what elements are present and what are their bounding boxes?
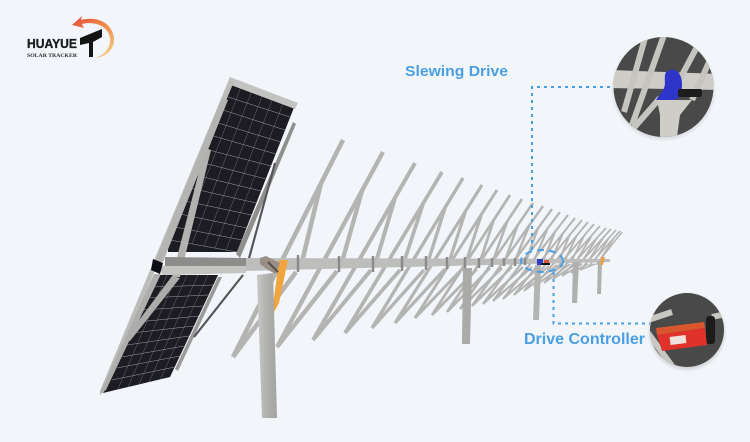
tube far section [243, 258, 610, 271]
dark strut lower [194, 275, 243, 337]
logo wordmark: HUAYUE [27, 37, 77, 51]
truss clamps on tube [298, 255, 525, 272]
leader line: slewing drive [532, 87, 650, 250]
controller front [657, 328, 707, 351]
beams [648, 312, 726, 366]
second post [462, 268, 472, 344]
fourth post [572, 262, 579, 303]
controller sticker [670, 335, 686, 345]
main support post [257, 273, 277, 418]
slewing drive marker on tube [537, 259, 550, 265]
circle shadow [647, 292, 727, 372]
panel grid lines [112, 87, 290, 389]
upper brace [172, 148, 211, 277]
tube open end [151, 259, 163, 274]
orange damper [274, 260, 288, 312]
panel long edge rail [100, 77, 233, 395]
circle contents [614, 37, 714, 137]
controller top [656, 322, 705, 335]
red controller [544, 260, 549, 263]
logo: Huayue Solar Tracker [27, 16, 114, 59]
lower panel cells [103, 275, 218, 393]
circle base [650, 293, 724, 367]
back rail lower [175, 277, 222, 371]
upper panel cells [168, 83, 295, 252]
logo tagline: SOLAR TRACKER [27, 53, 77, 59]
orange end detail [600, 257, 605, 265]
slewing ring [656, 70, 682, 100]
dashed highlight ring [521, 250, 563, 272]
left support rail [155, 98, 228, 262]
tube near lower face [160, 266, 246, 275]
blue drive [537, 259, 543, 265]
lower left rail [100, 274, 161, 393]
panel top frame [228, 77, 298, 109]
logo T mark [80, 29, 102, 57]
bearing bracket [268, 262, 278, 272]
label: Drive Controller: Drive Controller [524, 331, 645, 348]
dark strut upper [248, 163, 275, 262]
bearing on main post [260, 256, 280, 274]
detail circle: slewing drive [610, 35, 720, 142]
circle shadow [610, 36, 716, 142]
tube near upper face [165, 257, 246, 266]
label: Slewing Drive: Slewing Drive [405, 64, 508, 80]
torque tube [151, 255, 610, 275]
detail circle: drive controller [647, 292, 727, 372]
circle contents [648, 312, 726, 366]
circle base [614, 37, 714, 137]
back rail upper [236, 122, 296, 258]
post [657, 100, 692, 137]
diagonals [624, 35, 710, 130]
logo arc with arrow [72, 16, 114, 58]
beam [610, 70, 720, 90]
bracket [706, 316, 715, 344]
solar panel assembly [100, 77, 298, 395]
lower brace [125, 276, 180, 341]
black motor [541, 263, 550, 265]
motor [678, 89, 702, 97]
leader line: drive controller [554, 272, 650, 324]
fifth post [597, 261, 602, 294]
truss row: empty purlin frames receding along the tube [233, 140, 622, 357]
third post [533, 265, 541, 320]
